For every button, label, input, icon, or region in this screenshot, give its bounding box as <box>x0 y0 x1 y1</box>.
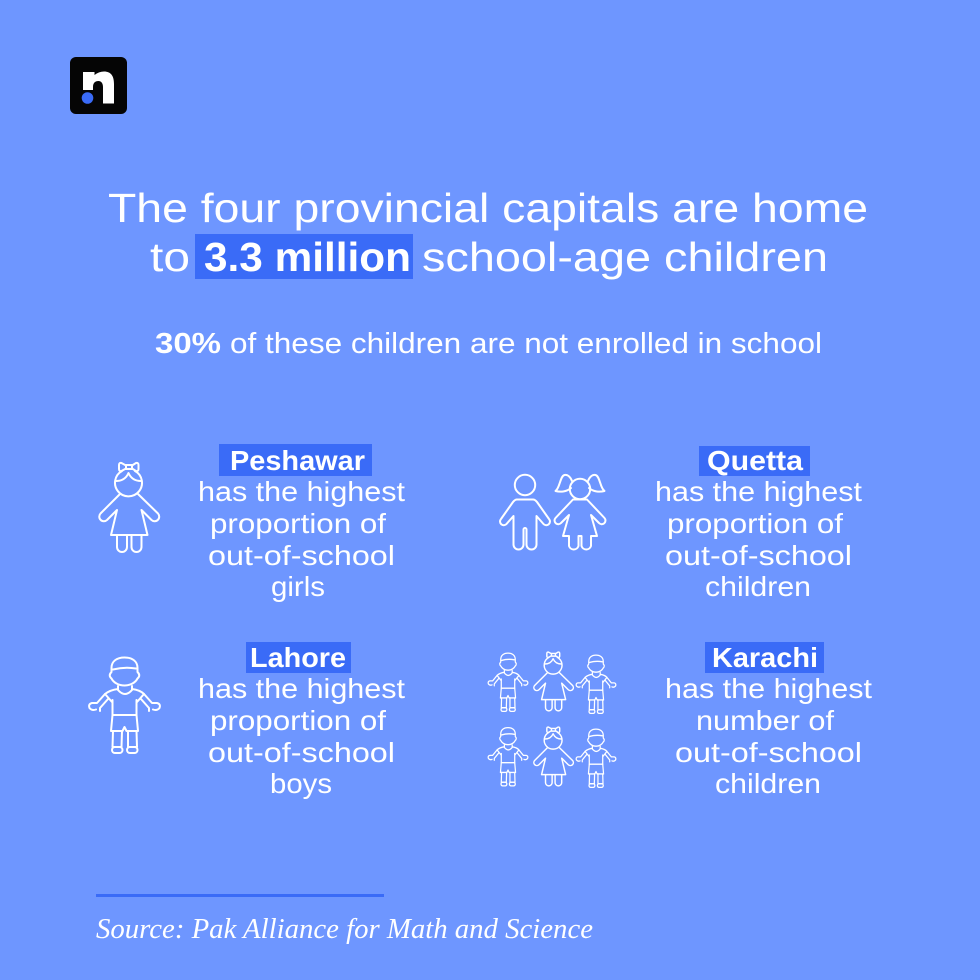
panel: Quetta: has the highest <box>655 476 862 507</box>
source rule and citation: Source: Pak Alliance for Math and Science <box>96 914 593 945</box>
subtitle: of these children are not enrolled in school <box>230 328 822 360</box>
subtitle: 30% <box>155 328 221 360</box>
panel: Peshawar: proportion of <box>210 508 386 539</box>
panel: Peshawar: girls <box>271 571 325 602</box>
source rule and citation <box>96 894 593 945</box>
panel: Quetta: proportion of <box>667 508 843 539</box>
title: school-age children <box>422 234 828 280</box>
panel: Lahore: boys <box>270 768 332 799</box>
panel: Karachi <box>665 642 872 799</box>
icon: boy <box>89 658 160 753</box>
icon: boy and girl pair <box>500 475 605 550</box>
panel: Quetta: out-of-school <box>665 540 852 571</box>
panel: Lahore: proportion of <box>210 705 386 736</box>
panel: Quetta: children <box>705 571 811 602</box>
panel: Karachi: number of <box>696 705 834 736</box>
panel: Lahore: has the highest <box>198 673 405 704</box>
highlight: 3.3 million <box>195 234 413 279</box>
icon: girl <box>99 463 159 552</box>
title <box>108 185 868 280</box>
panel: Karachi: children <box>715 768 821 799</box>
panel: Lahore <box>198 642 405 799</box>
panel: Karachi: has the highest <box>665 673 872 704</box>
panel: Quetta: Quetta <box>707 445 804 476</box>
title: The four provincial capitals are home <box>108 185 868 231</box>
icon: group of children <box>488 652 616 787</box>
panel: Peshawar: out-of-school <box>208 540 395 571</box>
panel: Lahore: Lahore <box>250 642 346 673</box>
panel: Karachi: out-of-school <box>675 737 862 768</box>
logo <box>70 57 127 114</box>
title: to <box>150 234 190 280</box>
panel: Quetta <box>655 445 862 602</box>
panel: Peshawar: Peshawar <box>230 445 365 476</box>
panel: Peshawar <box>198 444 405 602</box>
panel: Peshawar: has the highest <box>198 476 405 507</box>
panel: Lahore: out-of-school <box>208 737 395 768</box>
panel: Karachi: Karachi <box>712 642 818 673</box>
title: 3.3 million <box>204 234 411 280</box>
